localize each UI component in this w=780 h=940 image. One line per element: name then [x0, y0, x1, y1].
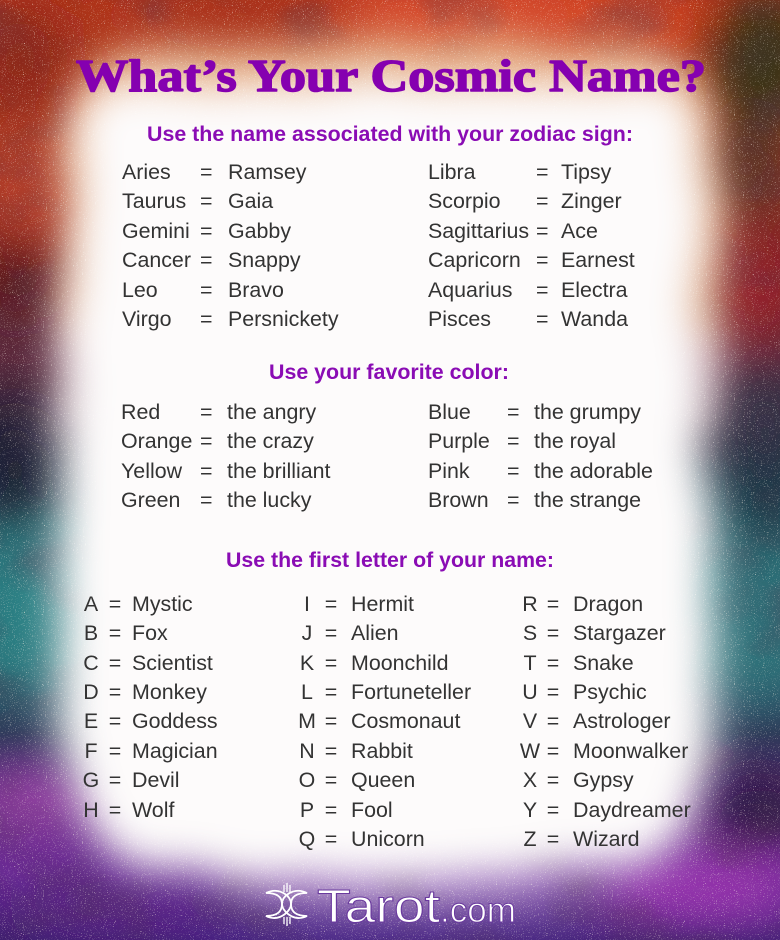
letter list: I to Q: =: [325, 739, 337, 763]
zodiac list: right column: Sagittarius: [428, 219, 529, 243]
letter list: R to Z: Astrologer: [573, 709, 670, 733]
letter list: I to Q: Fool: [351, 798, 393, 822]
letter list: A to H: C: [83, 651, 99, 675]
letter list: R to Z: Dragon: [573, 592, 643, 616]
letter list: A to H: Wolf: [132, 798, 174, 822]
color list: left column: =: [200, 488, 212, 512]
zodiac list: right column: Tipsy: [561, 160, 612, 184]
letter list: I to Q: Unicorn: [351, 827, 425, 851]
letter list: R to Z: =: [547, 768, 559, 792]
zodiac list: right column: Earnest: [561, 248, 635, 272]
color list: right column: Blue: [428, 400, 471, 424]
letter list: R to Z: Psychic: [573, 680, 647, 704]
zodiac list: right column: Capricorn: [428, 248, 521, 272]
color list: right column: =: [507, 429, 520, 453]
letter list: R to Z: =: [547, 798, 559, 822]
wordmark: .com: [440, 891, 516, 930]
color list: left column: the angry: [227, 400, 316, 424]
letter list: I to Q: Moonchild: [351, 651, 449, 675]
letter list: A to H: G: [83, 768, 99, 792]
letter list: I to Q: Alien: [351, 621, 399, 645]
color list: right column: [428, 400, 653, 512]
zodiac list: left column: Gaia: [228, 189, 273, 213]
letter list: R to Z: =: [547, 709, 559, 733]
zodiac list: left column: [122, 160, 339, 331]
color list: left column: =: [200, 459, 212, 483]
zodiac list: left column: Aries: [122, 160, 171, 184]
logo: Tarot.com: [266, 880, 516, 932]
letter list: R to Z: T: [523, 651, 537, 675]
letter list: R to Z: X: [523, 768, 537, 792]
color list: left column: the crazy: [227, 429, 314, 453]
letter list: R to Z: =: [547, 739, 559, 763]
color list: left column: =: [200, 400, 212, 424]
letter list: A to H: Devil: [132, 768, 180, 792]
letter list: A to H: =: [109, 768, 121, 792]
zodiac list: right column: =: [536, 160, 548, 184]
zodiac list: right column: =: [536, 278, 548, 302]
zodiac list: left column: Gabby: [228, 219, 291, 243]
letter list: A to H: E: [84, 709, 98, 733]
zodiac list: left column: =: [200, 160, 212, 184]
letter list: I to Q: L: [301, 680, 313, 704]
color list: right column: Purple: [428, 429, 490, 453]
letter list: R to Z: =: [547, 592, 559, 616]
letter list: R to Z: Moonwalker: [573, 739, 688, 763]
letter list: A to H: D: [83, 680, 99, 704]
letter list: A to H: B: [84, 621, 98, 645]
zodiac list: left column: =: [200, 219, 212, 243]
letter list: A to H: Monkey: [132, 680, 207, 704]
color list: right column: the grumpy: [534, 400, 641, 424]
title: What’s Your Cosmic Name?: [76, 50, 706, 101]
zodiac list: left column: Bravo: [228, 278, 284, 302]
letter list: I to Q: I: [304, 592, 310, 616]
letter list: I to Q: =: [325, 709, 337, 733]
letter list: R to Z: Y: [523, 798, 537, 822]
zodiac list: left column: Virgo: [122, 307, 172, 331]
letter list: I to Q: =: [325, 621, 337, 645]
color list: right column: the royal: [534, 429, 616, 453]
letter list: A to H: =: [109, 709, 121, 733]
letter list: A to H: =: [109, 798, 121, 822]
wordmark: Tarot: [317, 880, 440, 932]
letter list: I to Q: K: [300, 651, 315, 675]
letter list: A to H: Scientist: [132, 651, 213, 675]
zodiac list: left column: Snappy: [228, 248, 301, 272]
zodiac list: right column: Zinger: [561, 189, 622, 213]
letter list: R to Z: Gypsy: [573, 768, 634, 792]
zodiac list: right column: =: [536, 189, 548, 213]
letter list: R to Z: [520, 592, 691, 851]
letter list: A to H: F: [84, 739, 98, 763]
zodiac list: right column: Scorpio: [428, 189, 501, 213]
letter list: A to H: Mystic: [132, 592, 193, 616]
letter list: A to H: Goddess: [132, 709, 218, 733]
zodiac list: right column: Ace: [561, 219, 598, 243]
letter list: R to Z: =: [547, 827, 559, 851]
zodiac list: left column: Gemini: [122, 219, 190, 243]
letter list: A to H: [83, 592, 218, 822]
color list: left column: =: [200, 429, 212, 453]
color list: left column: Green: [121, 488, 180, 512]
zodiac list: left column: Ramsey: [228, 160, 307, 184]
letter list: A to H: Magician: [132, 739, 218, 763]
color list: left column: Red: [121, 400, 160, 424]
letter list: A to H: H: [83, 798, 99, 822]
letter list: A to H: =: [109, 651, 121, 675]
letter list: R to Z: S: [523, 621, 537, 645]
letter list: A to H: =: [109, 680, 121, 704]
zodiac list: left column: =: [200, 307, 212, 331]
letter list: R to Z: W: [520, 739, 541, 763]
letter list: I to Q: Rabbit: [351, 739, 413, 763]
letter list: R to Z: U: [522, 680, 538, 704]
letter list: A to H: =: [109, 621, 121, 645]
letter list: I to Q: N: [299, 739, 315, 763]
icon: triple moon: [266, 883, 307, 926]
color list: right column: =: [507, 459, 520, 483]
letter list: I to Q: =: [325, 827, 337, 851]
zodiac list: right column: =: [536, 219, 548, 243]
zodiac list: left column: Cancer: [122, 248, 191, 272]
heading: color: Use your favorite color:: [269, 361, 509, 384]
letter list: R to Z: =: [547, 621, 559, 645]
zodiac list: left column: Leo: [122, 278, 158, 302]
background: warm glow halo: [52, 39, 724, 430]
zodiac list: right column: Libra: [428, 160, 476, 184]
letter list: I to Q: Hermit: [351, 592, 414, 616]
letter list: R to Z: Daydreamer: [573, 798, 691, 822]
letter list: A to H: =: [109, 739, 121, 763]
letter list: I to Q: =: [325, 798, 337, 822]
zodiac list: right column: Aquarius: [428, 278, 512, 302]
letter list: I to Q: [298, 592, 471, 851]
letter list: R to Z: =: [547, 680, 559, 704]
letter list: R to Z: V: [523, 709, 538, 733]
letter list: I to Q: Fortuneteller: [351, 680, 471, 704]
color list: left column: the lucky: [227, 488, 312, 512]
zodiac list: left column: Taurus: [122, 189, 186, 213]
letter list: A to H: A: [84, 592, 99, 616]
color list: left column: Yellow: [121, 459, 183, 483]
letter list: R to Z: Wizard: [573, 827, 640, 851]
letter list: I to Q: Q: [299, 827, 315, 851]
color list: right column: the strange: [534, 488, 641, 512]
letter list: I to Q: Cosmonaut: [351, 709, 460, 733]
letter list: I to Q: O: [299, 768, 315, 792]
letter list: R to Z: Z: [523, 827, 537, 851]
zodiac list: left column: =: [200, 248, 212, 272]
color list: right column: =: [507, 400, 520, 424]
letter list: I to Q: M: [298, 709, 316, 733]
letter list: I to Q: P: [300, 798, 314, 822]
color list: left column: [121, 400, 331, 512]
letter list: R to Z: R: [522, 592, 538, 616]
letter list: I to Q: =: [325, 592, 337, 616]
letter list: I to Q: J: [302, 621, 312, 645]
letter list: I to Q: Queen: [351, 768, 415, 792]
color list: right column: the adorable: [534, 459, 653, 483]
zodiac list: right column: =: [536, 248, 548, 272]
zodiac list: right column: Electra: [561, 278, 628, 302]
zodiac list: left column: =: [200, 189, 212, 213]
color list: right column: Brown: [428, 488, 489, 512]
letter list: I to Q: =: [325, 651, 337, 675]
letter list: I to Q: =: [325, 768, 337, 792]
color list: left column: the brilliant: [227, 459, 331, 483]
zodiac list: right column: Wanda: [561, 307, 628, 331]
letter list: R to Z: Stargazer: [573, 621, 666, 645]
zodiac list: right column: =: [536, 307, 548, 331]
zodiac list: right column: [428, 160, 635, 331]
heading: first letter: Use the first letter of your name:: [226, 549, 554, 572]
letter list: R to Z: =: [547, 651, 559, 675]
zodiac list: right column: Pisces: [428, 307, 491, 331]
zodiac list: left column: =: [200, 278, 212, 302]
letter list: A to H: Fox: [132, 621, 168, 645]
heading: zodiac: Use the name associated with your zodiac sign:: [147, 123, 633, 146]
letter list: R to Z: Snake: [573, 651, 634, 675]
color list: right column: Pink: [428, 459, 470, 483]
background: white central panel: [56, 82, 712, 879]
color list: right column: =: [507, 488, 520, 512]
letter list: I to Q: =: [325, 680, 337, 704]
letter list: A to H: =: [109, 592, 121, 616]
color list: left column: Orange: [121, 429, 192, 453]
zodiac list: left column: Persnickety: [228, 307, 339, 331]
